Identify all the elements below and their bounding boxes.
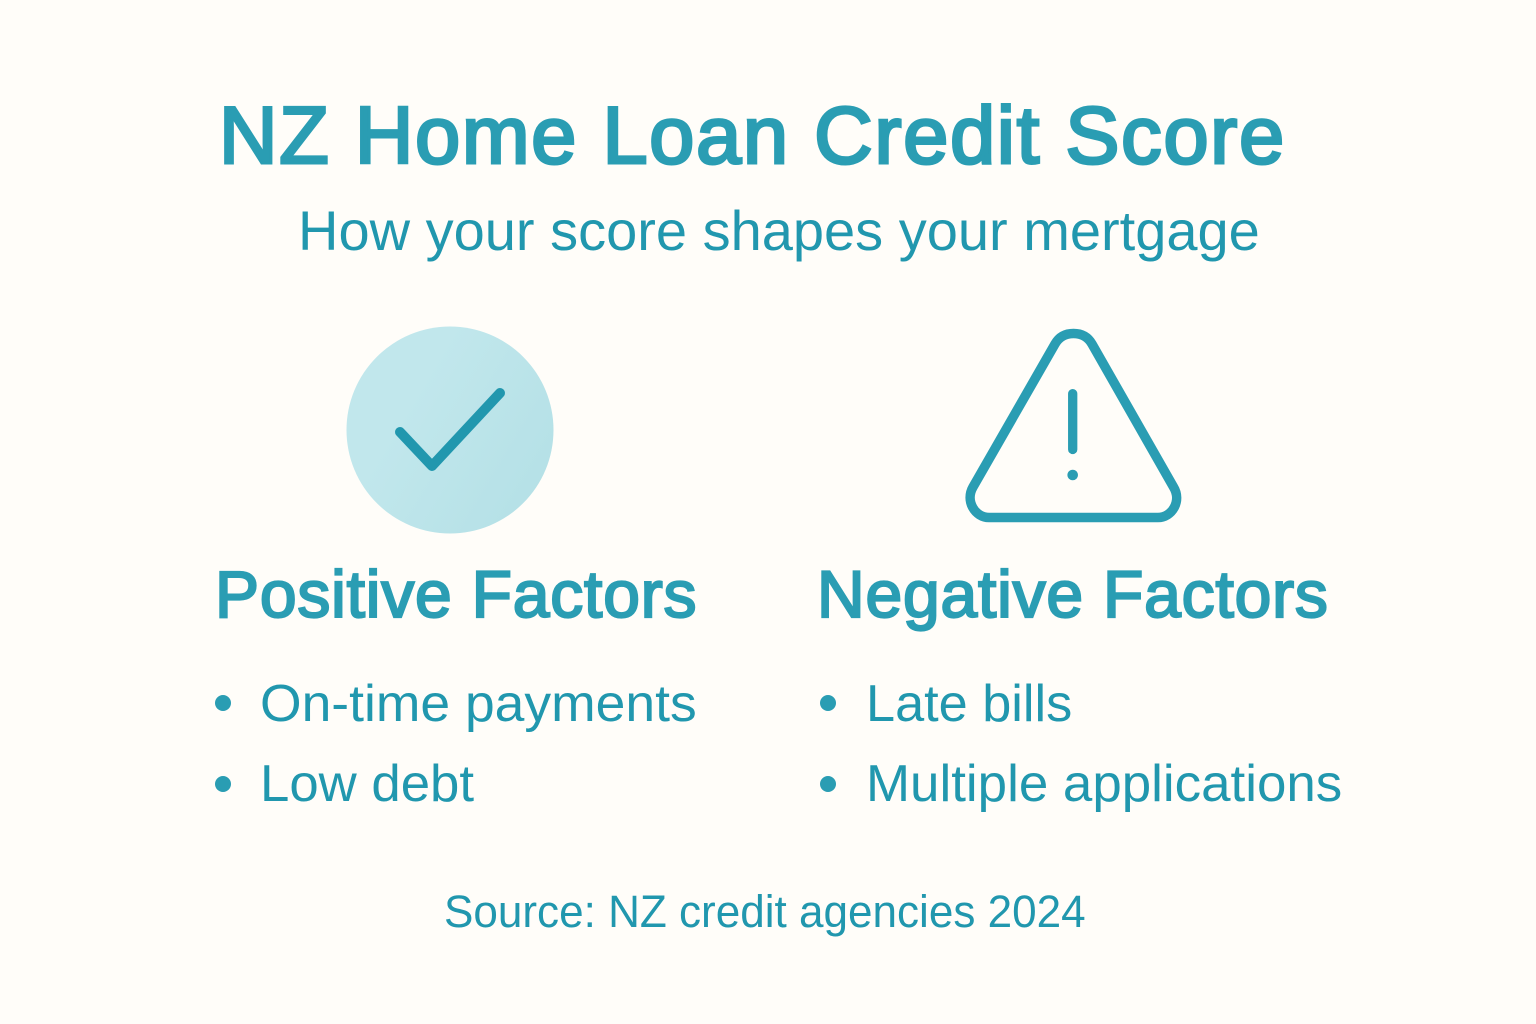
heading: positive factors: Positive Factors	[215, 557, 697, 631]
icon: warning triangle	[965, 328, 1182, 522]
panel: negative factors	[817, 557, 1342, 813]
bullet item: late bills: Late bills	[866, 675, 1072, 733]
heading: negative factors: Negative Factors	[817, 557, 1329, 631]
source note: Source: NZ credit agencies 2024	[444, 886, 1086, 937]
bullet item: on-time payments: On-time payments	[260, 675, 697, 733]
bullet item: multiple applications: Multiple applications	[866, 755, 1342, 813]
bullet item: low debt: Low debt	[260, 755, 474, 813]
icon: check mark circle	[346, 326, 554, 534]
panel: positive factors	[215, 557, 697, 813]
subtitle: How your score shapes your mertgage	[298, 199, 1260, 262]
title: NZ Home Loan Credit Score	[219, 91, 1286, 181]
